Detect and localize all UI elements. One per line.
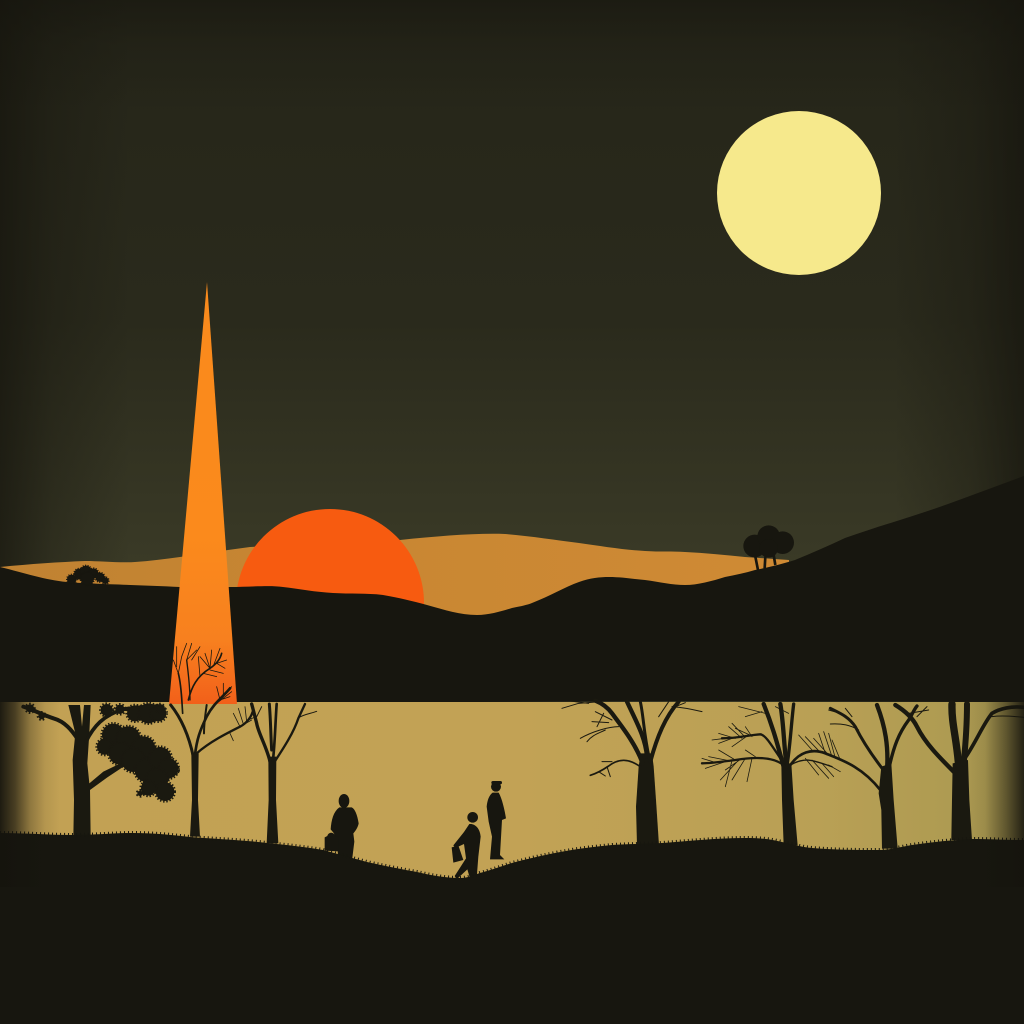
sky right vignette	[894, 0, 1024, 704]
walking figure with briefcase	[325, 794, 359, 863]
left trees	[23, 643, 317, 843]
sky top vignette	[0, 0, 1024, 110]
bare tree 7	[895, 704, 1024, 840]
foreground hill	[0, 833, 1024, 1024]
left hill tree	[67, 566, 109, 585]
field right vignette	[964, 702, 1024, 887]
sky background	[0, 0, 1024, 710]
figures group	[325, 781, 506, 879]
moon	[717, 111, 881, 275]
orange spire	[169, 282, 237, 704]
field left vignette	[0, 702, 60, 887]
bare tree 3	[252, 704, 317, 843]
standing figure with hat	[487, 781, 506, 859]
right trees	[562, 701, 1024, 849]
figure carrying bag	[452, 812, 481, 879]
golden lower field	[0, 702, 1024, 887]
right hill trees	[743, 525, 794, 570]
bare tree 6	[829, 705, 929, 849]
distant orange dunes	[0, 534, 789, 620]
bare tree 4	[562, 701, 702, 845]
dark middle hills	[0, 476, 1024, 704]
bare tree 5 with fine branches	[702, 704, 880, 845]
grass fringe	[0, 833, 1024, 878]
sky left vignette	[0, 0, 130, 704]
setting sun	[236, 509, 424, 697]
left tree with foliage	[23, 703, 178, 837]
bare tree in the spire	[171, 643, 256, 837]
